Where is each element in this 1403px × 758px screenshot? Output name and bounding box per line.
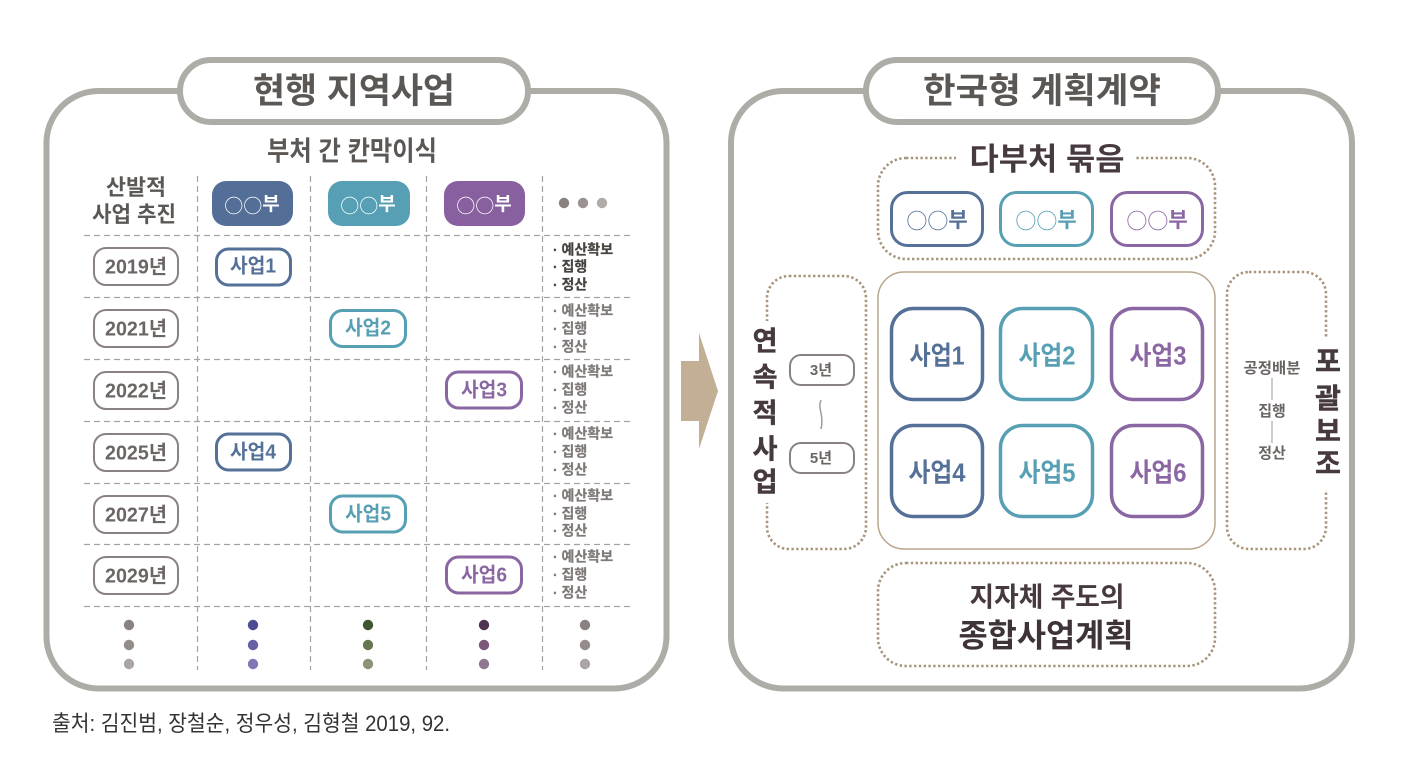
row 2027 <box>94 488 613 538</box>
group: project bundle: 사업1 <box>910 340 964 370</box>
group: local-government-led comprehensive plan: 종합사업계획 <box>958 618 1134 654</box>
title pill: current regional projects <box>180 60 528 122</box>
row 2019: 사업1 <box>230 254 276 278</box>
group: continuous projects: 3년 <box>810 362 832 379</box>
group: project bundle: 사업5 <box>1018 458 1076 488</box>
group: block grant: 보 <box>1315 416 1341 447</box>
row 2027: · 정산 <box>553 522 587 538</box>
row 2019: · 예산확보 <box>553 242 613 258</box>
group: project bundle <box>878 272 1215 549</box>
group: continuous projects: 속 <box>753 362 777 392</box>
group: multi-ministry bundle: 다부처 묶음 <box>970 142 1124 177</box>
ministry header: purple <box>444 181 525 226</box>
row 2022: · 집행 <box>553 382 587 398</box>
group: multi-ministry bundle: ○○부 <box>1015 206 1077 236</box>
panel: current regional projects <box>46 60 666 688</box>
group: continuous projects: 5년 <box>810 450 832 467</box>
row 2027: 사업5 <box>345 502 391 526</box>
row 2025: · 집행 <box>553 444 587 460</box>
row 2019 <box>94 242 613 292</box>
group: block grant: 괄 <box>1315 383 1341 414</box>
group: continuous projects <box>750 276 866 549</box>
group: block grant: 집행 <box>1258 403 1286 420</box>
row 2021: 사업2 <box>345 316 391 340</box>
group: continuous projects: 적 <box>753 398 777 428</box>
row 2021: · 집행 <box>553 320 587 336</box>
ministry header: teal: ○○부 <box>340 191 396 218</box>
row 2022: 2022년 <box>105 380 167 402</box>
source note: 출처: 김진범, 장철순, 정우성, 김형철 2019, 92. <box>52 711 450 736</box>
ministry header: teal <box>328 181 410 226</box>
row 2025 <box>94 426 613 478</box>
row 2021: · 예산확보 <box>553 302 613 318</box>
row 2021 <box>94 302 613 354</box>
row 2019: · 집행 <box>553 258 587 274</box>
row 2029: · 예산확보 <box>553 548 613 564</box>
row 2022: · 예산확보 <box>553 364 613 380</box>
row header: scattered project execution: 사업 추진 <box>92 202 176 227</box>
group: project bundle: 사업4 <box>908 458 966 488</box>
title pill: current regional projects: 현행 지역사업 <box>253 72 455 111</box>
group: continuous projects: 연 <box>753 326 777 356</box>
row 2029: · 집행 <box>553 566 587 582</box>
group: block grant: 공정배분 <box>1244 360 1301 377</box>
row 2022: · 정산 <box>553 400 587 416</box>
row 2025: 2025년 <box>105 442 167 464</box>
row 2029 <box>94 548 613 600</box>
row 2029: 사업6 <box>461 564 507 586</box>
row 2025: · 정산 <box>553 462 587 478</box>
row 2022: 사업3 <box>461 378 507 402</box>
row header: scattered project execution: 산발적 <box>106 175 166 200</box>
row 2029: 2029년 <box>105 564 167 588</box>
group: continuous projects: 업 <box>753 468 777 498</box>
row 2019: 2019년 <box>105 256 167 278</box>
row header: scattered project execution <box>92 175 176 227</box>
group: project bundle: 사업3 <box>1130 340 1186 370</box>
group: local-government-led comprehensive plan: 지자체 주도의 <box>970 582 1124 612</box>
title pill: Korean planning contract: 한국형 계획계약 <box>923 72 1161 111</box>
arrow <box>681 333 718 449</box>
ministry header: purple: ○○부 <box>456 191 512 218</box>
row 2022 <box>94 364 613 416</box>
row 2027: 2027년 <box>105 504 167 526</box>
title pill: Korean planning contract <box>866 60 1218 122</box>
group: block grant: 정산 <box>1258 445 1286 462</box>
group: project bundle: 사업2 <box>1018 340 1076 370</box>
group: multi-ministry bundle: ○○부 <box>906 206 968 236</box>
ministry header: blue: ○○부 <box>224 191 280 218</box>
group: local-government-led comprehensive plan <box>878 563 1215 666</box>
ministry header: blue <box>212 181 293 226</box>
row 2021: · 정산 <box>553 338 587 354</box>
group: block grant: 조 <box>1315 448 1341 479</box>
group: multi-ministry bundle: ○○부 <box>1126 206 1188 236</box>
row 2021: 2021년 <box>105 318 167 340</box>
header ellipsis dots <box>559 198 607 208</box>
group: multi-ministry bundle <box>878 142 1215 259</box>
group: project bundle: 사업6 <box>1130 458 1186 488</box>
row 2027: · 집행 <box>553 506 587 522</box>
row 2019: · 정산 <box>553 276 587 292</box>
row 2027: · 예산확보 <box>553 488 613 504</box>
panel: Korean planning contract <box>731 60 1352 688</box>
row 2029: · 정산 <box>553 584 587 600</box>
group: continuous projects: 사 <box>753 434 778 464</box>
group: block grant: 포 <box>1315 346 1341 377</box>
subheading: silo between ministries: 부처 간 칸막이식 <box>267 136 437 166</box>
row 2025: · 예산확보 <box>553 426 613 442</box>
continuation dots <box>124 620 590 669</box>
row 2025: 사업4 <box>230 440 277 464</box>
table grid lines <box>84 176 630 670</box>
group: block grant <box>1227 272 1342 549</box>
